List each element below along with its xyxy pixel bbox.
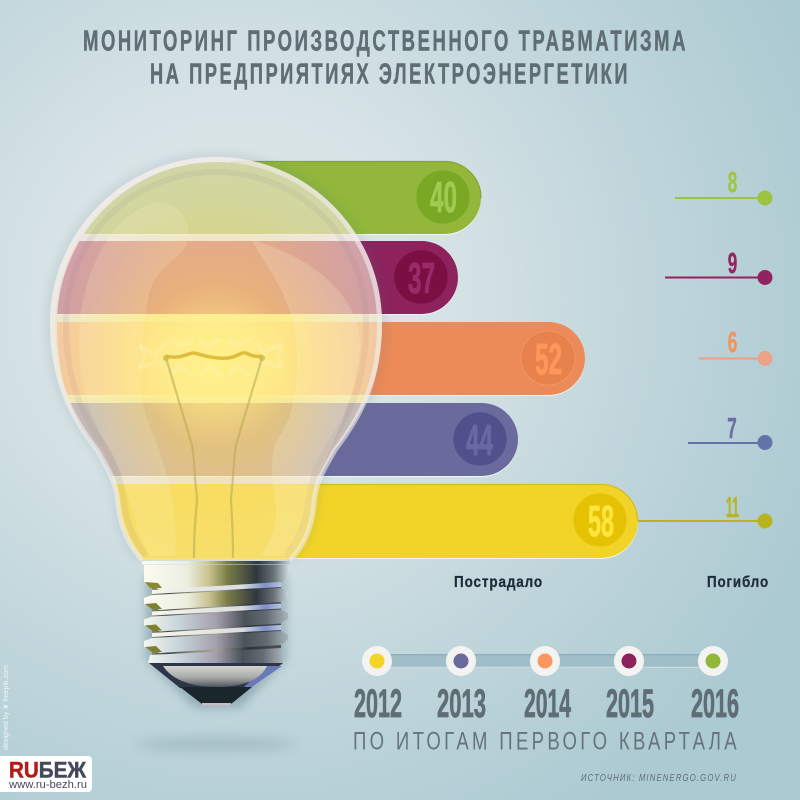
tinted light bands inside the glass (50, 241, 382, 560)
bar 2015 purple: 37 (408, 254, 435, 303)
collar (144, 565, 288, 590)
logo wordmark: RUБЕЖ (9, 758, 86, 782)
deaths 2016: 8 (728, 167, 737, 199)
bar 2013 violet: 44 (466, 416, 493, 465)
deaths 2015: 9 (728, 248, 737, 280)
node 2016 (698, 646, 728, 676)
light bulb (50, 157, 382, 560)
thread 3 (144, 625, 288, 653)
node 2013 (446, 646, 476, 676)
logo url: www.ru-bezh.ru (8, 779, 87, 791)
bar 2015 purple (57, 241, 458, 315)
bar 2014 orange: 52 (535, 335, 562, 384)
node 2015 (614, 646, 644, 676)
base shadow (146, 575, 286, 708)
deaths 2014: 6 (728, 327, 737, 359)
bars: injured per year (0, 161, 638, 559)
freepik credit: designed by ❦ freepik.com (3, 665, 10, 750)
column label: injured: Пострадало (454, 574, 543, 591)
year labels: 2015 (606, 682, 654, 726)
bar 2014 orange (0, 322, 585, 396)
bulb glass with glow (50, 157, 382, 560)
lower stripe (148, 648, 283, 663)
inner highlight shape (79, 203, 188, 556)
deaths 2012: 11 (726, 492, 739, 524)
bar 2016 green (84, 160, 482, 235)
filament anchors (163, 355, 265, 361)
deaths indicators (638, 167, 772, 528)
bar 2013 violet (70, 403, 518, 477)
base core (152, 578, 281, 662)
bulb base: screw cap (142, 561, 290, 708)
column label: killed: Погибло (707, 574, 769, 591)
title (83, 26, 688, 90)
insulator blue reflection (243, 666, 282, 688)
bar 2012 yellow: 58 (588, 497, 614, 546)
bulb ground shadow (136, 738, 296, 750)
year labels: 2012 (354, 682, 402, 726)
filament zigzag glow (140, 339, 282, 376)
deaths 2015 (665, 248, 772, 285)
bar 2012 yellow (114, 484, 638, 559)
contact tip (180, 687, 252, 704)
node 2012 (362, 646, 392, 676)
deaths 2016 (675, 167, 772, 206)
deaths 2013: 7 (727, 413, 737, 445)
deaths 2013 (688, 413, 772, 450)
glass inner contour (66, 172, 366, 556)
thread 2 (144, 604, 288, 632)
filament supports (166, 358, 262, 558)
year labels: 2014 (524, 682, 571, 726)
logo plate (0, 756, 92, 792)
collar rim (142, 561, 290, 564)
year labels: 2013 (437, 682, 486, 726)
contact edge (202, 703, 231, 706)
timeline track (377, 654, 713, 668)
timeline legend (354, 646, 739, 726)
insulator dome (163, 666, 267, 687)
year labels: 2016 (691, 682, 739, 726)
logo (0, 756, 92, 792)
bar 2016 green: 40 (430, 173, 457, 222)
deaths 2014 (699, 327, 772, 366)
olive tip (145, 582, 162, 588)
thread 1 (144, 582, 288, 610)
year labels (354, 682, 739, 726)
right highlight shape (252, 240, 360, 556)
node 2014 (530, 646, 560, 676)
insulator dark body (149, 663, 283, 688)
bulb outer shadow (50, 157, 382, 560)
filament coil (166, 353, 262, 358)
source: ИСТОЧНИК: MINENERGO.GOV.RU (581, 773, 737, 784)
deaths 2012 (638, 492, 772, 528)
glass rim (52, 160, 380, 560)
